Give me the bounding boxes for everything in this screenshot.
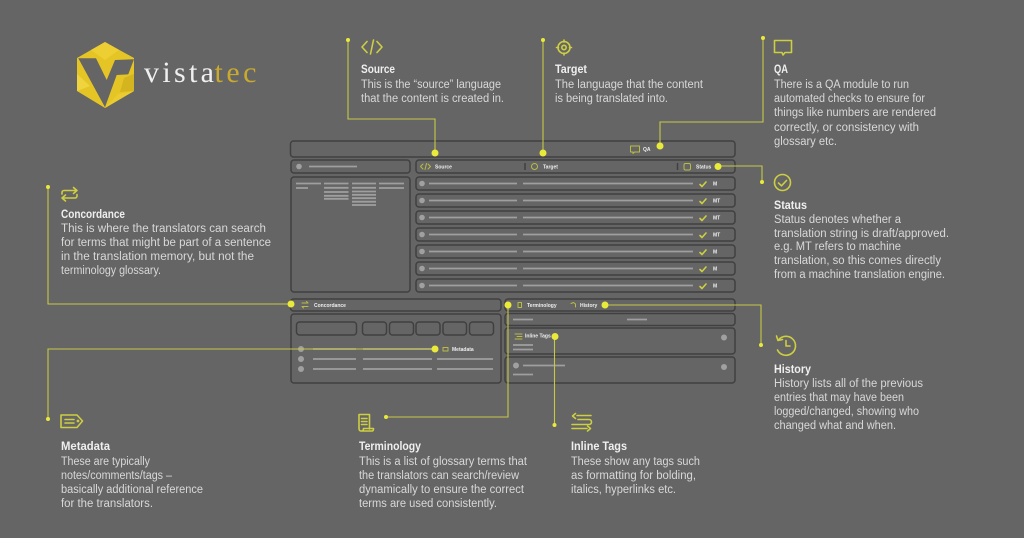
panel: bottom entry (505, 357, 735, 383)
icon: QA speech bubble (774, 40, 792, 55)
text: source: Source (361, 62, 395, 76)
text: terminology: dynamically to ensure the correct (359, 484, 525, 496)
logo: vistatec (77, 42, 256, 108)
text: metadata (61, 439, 203, 510)
text: status: translation string is draft/approved. (774, 228, 949, 240)
text: inline tags: as formatting for bolding, (571, 470, 696, 482)
connector: terminology (384, 302, 512, 419)
text: status: translation, so this comes directly (774, 255, 941, 267)
text: source (361, 62, 504, 105)
row 6: M (713, 266, 717, 272)
panel: concordance search and results: Metadata (452, 347, 474, 353)
text: QA: correctly, or consistency with (774, 122, 919, 134)
icon: history clock (776, 336, 796, 355)
panel: concordance search and results (291, 314, 501, 383)
row 3 (416, 211, 735, 224)
text: concordance: terminology glossary. (61, 265, 161, 277)
connector: metadata (46, 346, 438, 421)
text: inline tags: italics, hyperlinks etc. (571, 484, 676, 496)
text: concordance (61, 207, 271, 277)
text: inline tags (571, 439, 700, 496)
text: concordance: Concordance (61, 207, 125, 221)
row 4 (416, 228, 735, 241)
connector: inline tags (552, 333, 558, 427)
text: history: changed what and when. (774, 420, 896, 432)
row 5 (416, 245, 735, 258)
text: source: This is the “source” language (361, 79, 501, 91)
text: status: e.g. MT refers to machine (774, 241, 901, 253)
row 6 (416, 262, 735, 275)
row 1: M (713, 182, 717, 188)
panel: terminology and history bar: Terminology (527, 303, 557, 309)
text: metadata: Metadata (61, 439, 110, 453)
panel: terminology and history bar: History (580, 303, 597, 309)
text: terminology: terms are used consistently. (359, 498, 497, 510)
connector: concordance (46, 185, 294, 308)
text: source: that the content is created in. (361, 93, 504, 105)
icon: terminology scroll (359, 414, 374, 431)
text: QA (774, 62, 936, 148)
text: history: logged/changed, showing who (774, 406, 919, 418)
connector: history (602, 302, 763, 347)
row 2: MT (713, 198, 720, 204)
panel: top bar with QA: QA (643, 147, 651, 153)
text: QA: There is a QA module to run (774, 79, 909, 91)
panel: column header row: Source (435, 164, 452, 170)
panel: file list (291, 177, 410, 292)
row 5: M (713, 250, 717, 256)
icon: target (556, 40, 572, 55)
text: concordance: This is where the translators can search (61, 223, 266, 235)
icon: status check circle (774, 174, 790, 190)
panel: terminology and history bar (505, 299, 735, 311)
icon: metadata tag (61, 415, 82, 428)
connector: source (346, 38, 438, 156)
text: terminology (359, 439, 528, 510)
logo: vistatec: tec (214, 56, 256, 89)
text: concordance: for terms that might be part of a sentence (61, 237, 271, 249)
row 1 (416, 177, 735, 190)
panel: column header row: Status (696, 164, 712, 170)
text: QA: QA (774, 62, 788, 76)
text: QA: things like numbers are rendered (774, 107, 936, 119)
text: status: Status (774, 198, 807, 212)
text: history: History (774, 362, 811, 376)
row 4: MT (713, 232, 720, 238)
text: inline tags: These show any tags such (571, 456, 700, 468)
text: target: Target (555, 62, 587, 76)
icon: source code brackets (362, 40, 382, 54)
text: metadata: basically additional reference (61, 484, 203, 496)
text: inline tags: Inline Tags (571, 439, 627, 453)
panel: concordance bar: Concordance (314, 303, 346, 309)
text: concordance: in the translation memory, but not the (61, 251, 254, 263)
connector: status (714, 163, 764, 184)
text: history (774, 362, 923, 432)
panel: column header row: Target (543, 164, 558, 170)
connector: target (540, 38, 546, 156)
text: terminology: This is a list of glossary terms that (359, 456, 528, 468)
panel: top bar with QA (290, 141, 735, 157)
panel: concordance bar (290, 299, 501, 311)
text: target: is being translated into. (555, 93, 668, 105)
interface mockup (290, 141, 735, 383)
text: status (774, 198, 949, 281)
panel: search bar (291, 160, 410, 173)
icon: inline tags (572, 414, 592, 431)
panel: terminology row (505, 314, 735, 326)
translation rows (416, 177, 735, 292)
text: metadata: These are typically (61, 456, 150, 468)
text: history: entries that may have been (774, 392, 904, 404)
text: terminology: Terminology (359, 439, 421, 453)
panel: inline tags (505, 328, 735, 354)
row 2 (416, 194, 735, 207)
text: terminology: the translators can search/review (359, 470, 520, 482)
panel: column header row (416, 160, 735, 173)
panel: inline tags: Inline Tags (525, 334, 551, 340)
connector: QA (656, 36, 765, 150)
text: target: The language that the content (555, 79, 704, 91)
row 7: M (713, 284, 717, 290)
icon: concordance arrows (62, 188, 77, 201)
text: target (555, 62, 704, 105)
logo: vistatec: vista (144, 56, 214, 89)
row 3: MT (713, 216, 720, 222)
text: status: from a machine translation engine. (774, 269, 945, 281)
row 7 (416, 279, 735, 292)
text: QA: glossary etc. (774, 136, 837, 148)
text: status: Status denotes whether a (774, 214, 902, 226)
text: metadata: for the translators. (61, 498, 153, 510)
text: history: History lists all of the previous (774, 378, 923, 390)
text: metadata: notes/comments/tags – (61, 470, 173, 482)
text: QA: automated checks to ensure for (774, 93, 925, 105)
